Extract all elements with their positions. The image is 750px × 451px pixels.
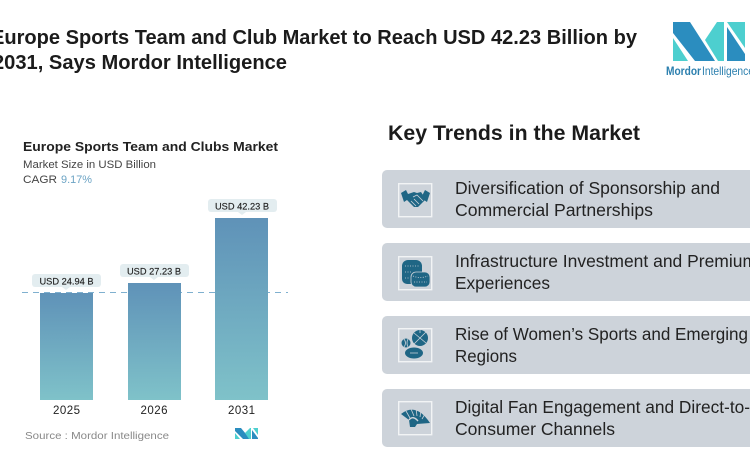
title: Europe Sports Team and Club Market to Reach USD 42.23 Billion by [0,27,638,49]
value label: 2031: USD 42.23 B [215,202,269,212]
trend text: Diversification of Sponsorship and [455,178,720,198]
bar: 2026 [128,283,181,400]
bar chart [22,199,288,417]
chart heading: Europe Sports Team and Clubs Market [23,139,279,154]
panel: trend 4 [382,389,750,447]
panel: trend 1 [382,170,750,228]
chart heading: Market Size in USD Billion [23,159,156,171]
trend text: Consumer Channels [455,419,615,439]
logo: Mordor Intelligence: Mordor [666,64,701,78]
x axis labels: 2031 [228,405,255,417]
value label: 2025: USD 24.94 B [40,276,94,288]
trend text: Digital Fan Engagement and Direct-to- [455,397,750,417]
trend text: Experiences [455,273,550,293]
panel: trend 3 [382,316,750,374]
trend text: Commercial Partnerships [455,200,653,220]
trend text [455,178,720,220]
value label: 2026: USD 27.23 B [127,266,181,278]
chart heading: 9.17% [61,174,92,186]
icon: fan [401,408,430,427]
heading: key trends: Key Trends in the Market [388,122,640,145]
value label: 2031 [208,199,277,215]
bar: 2025 [40,293,93,400]
x axis labels [53,405,255,417]
value label: 2026 [120,264,189,280]
icon: coins [402,260,430,287]
trend text: Regions [455,346,517,366]
icon: sports balls [402,330,428,358]
source: Source : Mordor Intelligence [25,430,169,442]
icon: handshake [401,190,430,207]
trend text: Infrastructure Investment and Premium [455,251,750,271]
trend text [455,251,750,293]
title [0,27,638,74]
panel: trend 2 [382,243,750,301]
chart heading: CAGR [23,174,57,186]
trend text [455,397,750,439]
trend text [455,324,748,366]
value label: 2025 [32,274,101,290]
bar: 2031 [215,218,268,400]
logo: Mordor Intelligence [666,22,750,78]
small logo [235,428,258,439]
title: 2031, Says Mordor Intelligence [0,52,287,74]
x axis labels: 2025 [53,405,80,417]
trend text: Rise of Women’s Sports and Emerging [455,324,748,344]
x axis labels: 2026 [140,405,168,417]
chart heading [23,139,279,186]
